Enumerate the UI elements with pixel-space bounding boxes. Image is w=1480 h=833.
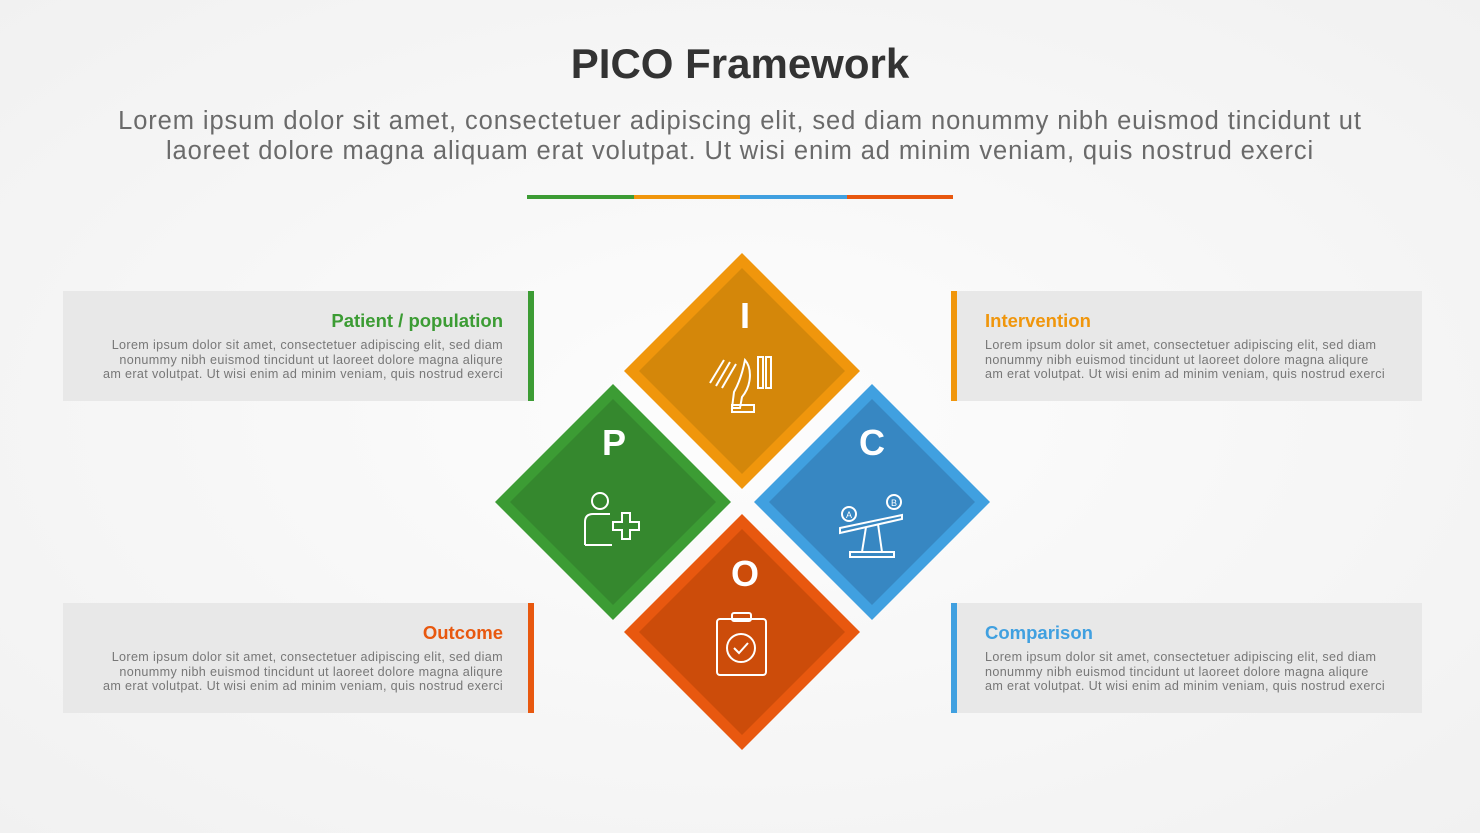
panel: intervention: Intervention (985, 310, 1091, 331)
panel: outcome (63, 603, 528, 713)
diamond C (754, 384, 990, 620)
diamond I (624, 253, 860, 489)
panel: patient: nonummy nibh euismod tincidunt ut laoreet dolore magna aliqure (119, 353, 503, 367)
panel: patient: Lorem ipsum dolor sit amet, consectetuer adipiscing elit, sed diam (112, 338, 503, 352)
colour divider (527, 195, 953, 199)
panel: outcome: Lorem ipsum dolor sit amet, consectetuer adipiscing elit, sed diam (112, 650, 503, 664)
panel: intervention: Lorem ipsum dolor sit amet, consectetuer adipiscing elit, sed diam (985, 338, 1376, 352)
subtitle: Lorem ipsum dolor sit amet, consectetuer adipiscing elit, sed diam nonummy nibh euismod tincidunt ut (118, 107, 1362, 135)
panel: patient: am erat volutpat. Ut wisi enim ad minim veniam, quis nostrud exerci (103, 367, 503, 381)
panel: outcome: nonummy nibh euismod tincidunt ut laoreet dolore magna aliqure (119, 665, 503, 679)
diamond C: A (846, 510, 852, 520)
diamond O: O (731, 553, 759, 594)
panel: comparison: am erat volutpat. Ut wisi enim ad minim veniam, quis nostrud exerci (985, 679, 1385, 693)
diamond O (624, 514, 860, 750)
subtitle: laoreet dolore magna aliquam erat volutpat. Ut wisi enim ad minim veniam, quis nostrud exerci (166, 137, 1314, 165)
panel: outcome: Outcome (423, 622, 503, 643)
diamond I: I (740, 295, 750, 336)
panel: patient (63, 291, 528, 401)
panel: comparison: Lorem ipsum dolor sit amet, consectetuer adipiscing elit, sed diam (985, 650, 1376, 664)
panel: comparison: Comparison (985, 622, 1093, 643)
panel: intervention: nonummy nibh euismod tincidunt ut laoreet dolore magna aliqure (985, 353, 1369, 367)
title: PICO Framework (571, 40, 909, 87)
panel: intervention: am erat volutpat. Ut wisi enim ad minim veniam, quis nostrud exerci (985, 367, 1385, 381)
diamond C: B (891, 498, 897, 508)
icon: hand (710, 357, 771, 412)
subtitle (118, 107, 1362, 165)
panel: patient: Patient / population (331, 310, 503, 331)
icon: balance scale (840, 495, 902, 557)
panel: comparison (957, 603, 1422, 713)
panel: outcome: am erat volutpat. Ut wisi enim ad minim veniam, quis nostrud exerci (103, 679, 503, 693)
panel: comparison: nonummy nibh euismod tincidunt ut laoreet dolore magna aliqure (985, 665, 1369, 679)
icon: clipboard check (717, 613, 766, 675)
panel: intervention (957, 291, 1422, 401)
diamond P: P (602, 422, 626, 463)
diamond P (495, 384, 731, 620)
icon: person plus (585, 493, 639, 545)
diamond C: C (859, 422, 885, 463)
